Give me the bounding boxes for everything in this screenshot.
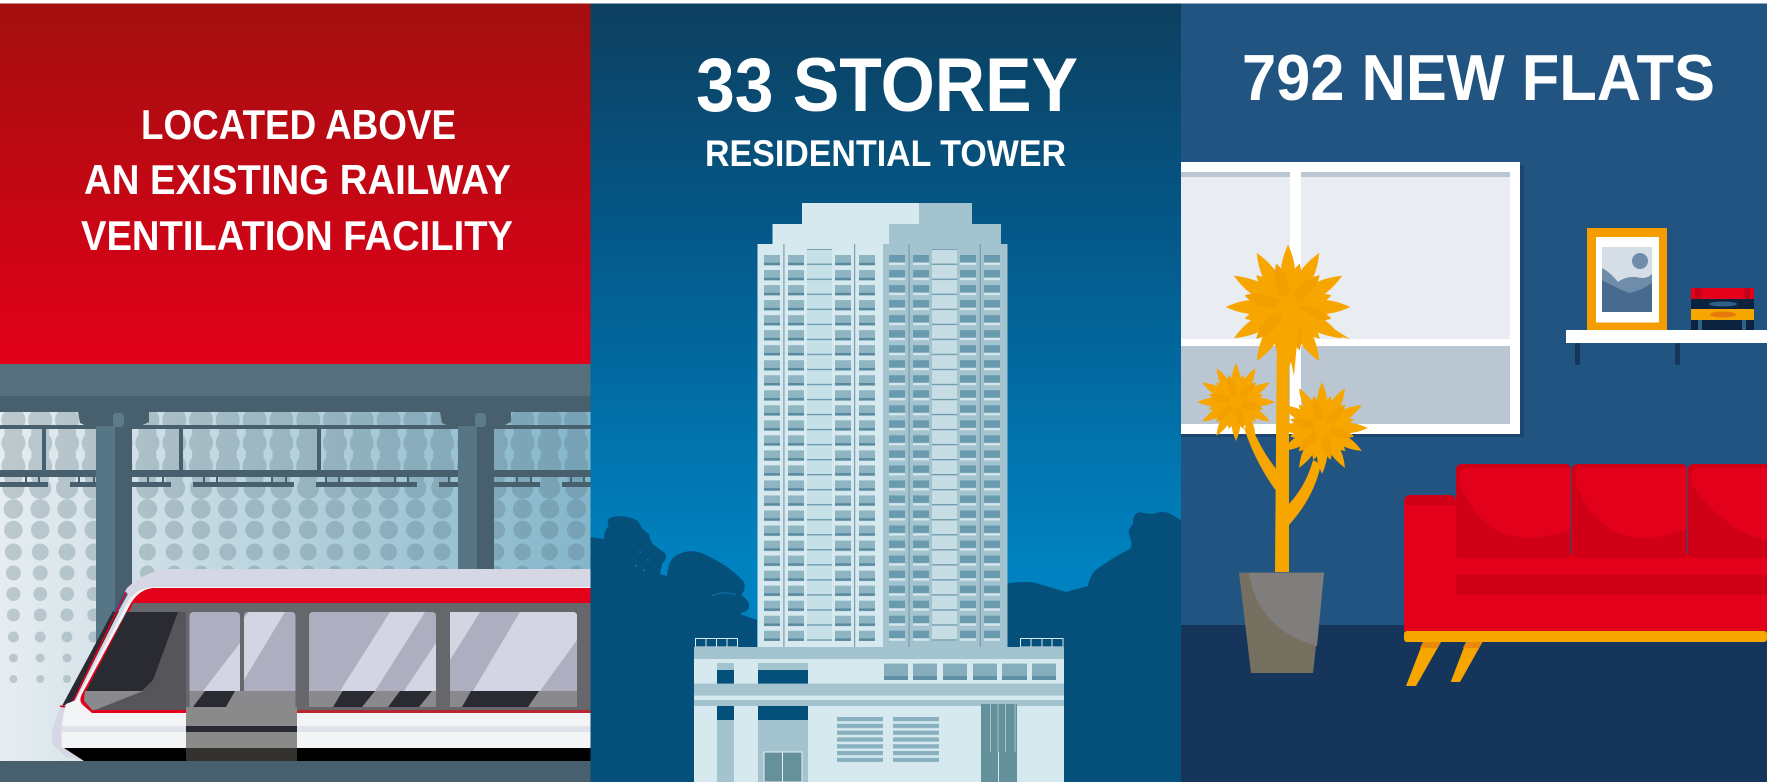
panel: 792 new flats (1181, 4, 1767, 782)
potted plant (1197, 244, 1368, 673)
living room wall (1181, 4, 1767, 626)
plant stems (1244, 320, 1321, 572)
heading: located above an existing railway ventilation facility (81, 101, 513, 259)
perforated station wall (0, 412, 591, 762)
left face windows (764, 255, 875, 641)
white nose stripe (62, 587, 591, 748)
overhead canopy beams (0, 364, 591, 412)
panel: 33 storey residential tower (590, 4, 1182, 782)
ventilation louvres (837, 717, 939, 762)
wall shelf (1566, 330, 1767, 365)
side windscreen sliver (62, 611, 119, 706)
body side stripes (62, 726, 591, 732)
platform floor (0, 761, 591, 782)
small flower head right (1276, 382, 1368, 474)
sofa seat and arm (1404, 495, 1767, 631)
sky gradient background (590, 4, 1182, 782)
red roof band (80, 588, 591, 713)
window (1181, 162, 1524, 437)
red header background (0, 4, 591, 364)
subheading: residential tower: RESIDENTIAL TOWER (705, 133, 1066, 174)
podium dark openings (717, 663, 734, 670)
podium window row (884, 664, 1056, 680)
tree silhouette right (1005, 512, 1181, 782)
heading: located above an existing railway ventilation facility: VENTILATION FACILITY (81, 212, 513, 259)
heading: 792 new flats: 792 NEW FLATS (1242, 41, 1715, 114)
floor (1181, 625, 1767, 782)
sofa base rail (1404, 631, 1767, 642)
windscreen (86, 612, 178, 691)
sofa legs (1406, 642, 1441, 686)
rooftop railing left (696, 638, 738, 647)
plant pot (1239, 573, 1324, 673)
framed picture (1587, 228, 1667, 330)
left face centre bay (807, 249, 832, 641)
carriage window one (309, 612, 436, 707)
facade fins (783, 244, 981, 647)
heading: 33 storey: 33 STOREY (696, 43, 1078, 128)
train door lower (186, 707, 297, 761)
panel: railway ventilation facility (0, 4, 591, 782)
light rail train (52, 569, 591, 761)
cab and side panel (84, 603, 591, 710)
red sofa (1404, 464, 1767, 686)
overhead rails and wires (0, 425, 591, 487)
tree silhouette left (590, 516, 757, 782)
sofa back cushions (1456, 464, 1767, 558)
small flower head left (1197, 363, 1275, 441)
train shell (52, 569, 591, 761)
crown (802, 203, 919, 224)
heading: located above an existing railway ventilation facility: AN EXISTING RAILWAY (84, 156, 511, 203)
carriage window two (450, 612, 577, 707)
right face centre bay (932, 249, 957, 641)
station pillar right (440, 412, 511, 762)
large flower head (1226, 244, 1350, 376)
podium building (694, 647, 1064, 782)
tower faces (758, 244, 883, 647)
residential tower (758, 203, 1008, 647)
right face windows (889, 255, 1000, 641)
rooftop railing right (1020, 638, 1063, 647)
entrance door (764, 752, 802, 782)
station pillar left (78, 412, 149, 762)
stack of books (1691, 288, 1754, 330)
heading: located above an existing railway ventilation facility: LOCATED ABOVE (141, 101, 456, 148)
door windows (190, 612, 296, 707)
vented gate (981, 704, 1017, 782)
